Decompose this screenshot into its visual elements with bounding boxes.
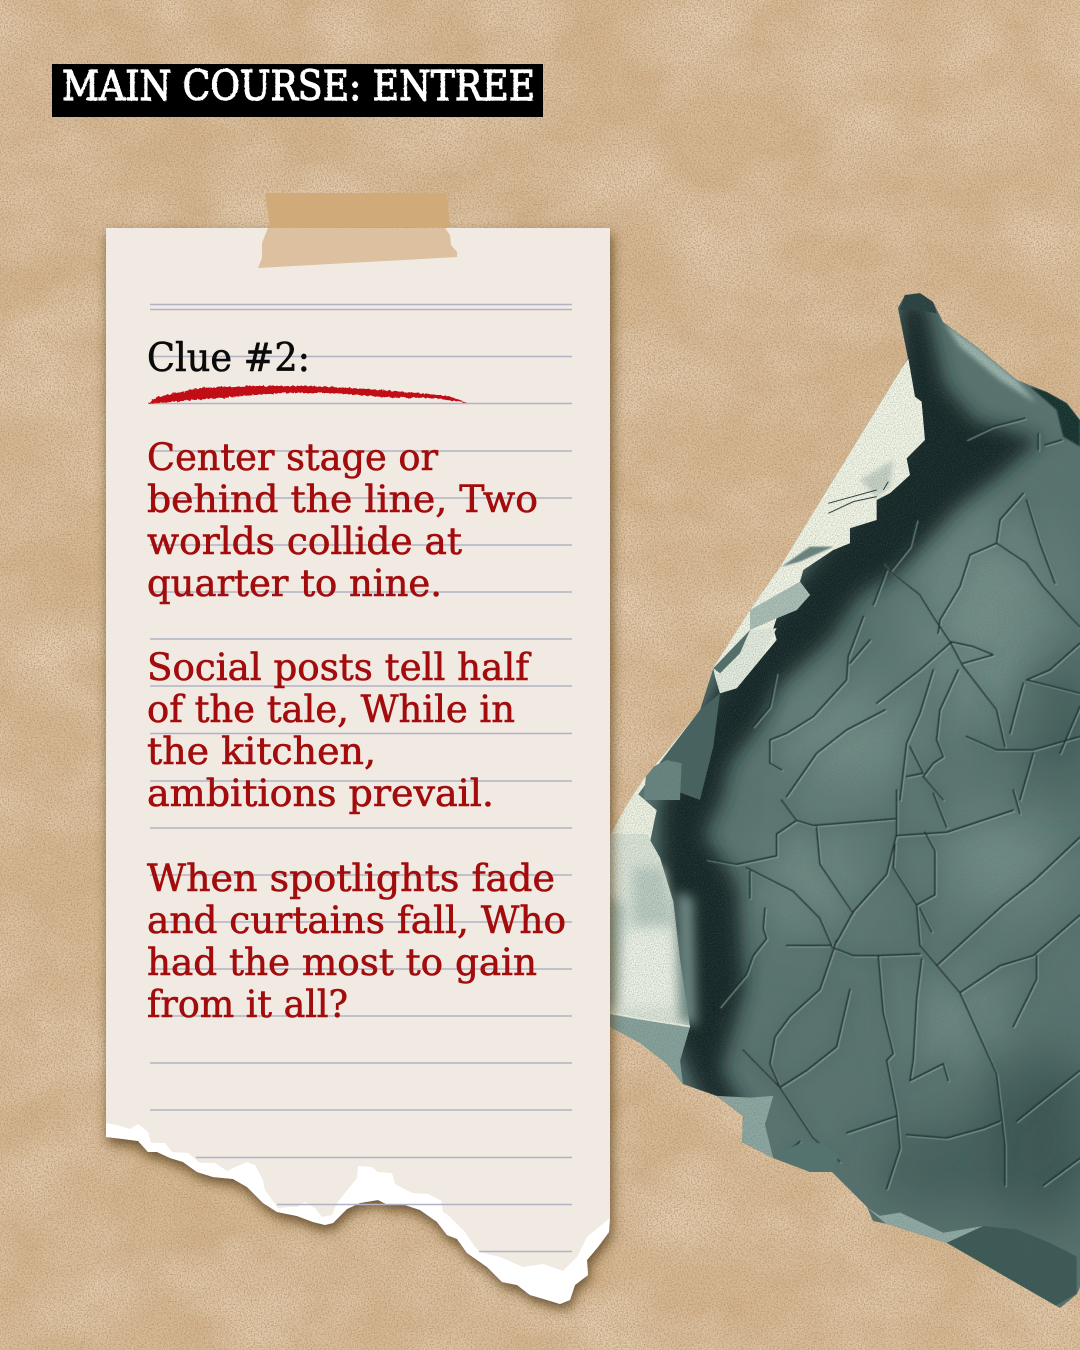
verse 1: Center stage or bbox=[147, 436, 438, 479]
verse 3 bbox=[147, 857, 566, 1026]
upper cream flap bbox=[615, 358, 925, 826]
verse 2: the kitchen, bbox=[147, 730, 376, 773]
verse 1: behind the line, Two bbox=[147, 478, 538, 521]
red brush underline bbox=[148, 386, 468, 404]
notebook rule lines bbox=[150, 304, 572, 1252]
verse 1: worlds collide at bbox=[147, 520, 463, 563]
verse 3: and curtains fall, Who bbox=[147, 899, 566, 942]
paper face bbox=[106, 228, 610, 1271]
verse 1: quarter to nine. bbox=[147, 562, 442, 605]
verse 1 bbox=[147, 436, 538, 605]
verse 2: of the tale, While in bbox=[147, 688, 515, 731]
verse 2: Social posts tell half bbox=[147, 646, 532, 689]
verse 2 bbox=[147, 646, 532, 815]
lower cream flap bbox=[590, 790, 1077, 1307]
verse 3: had the most to gain bbox=[147, 941, 537, 984]
masking tape bbox=[258, 193, 457, 268]
note paper sheet bbox=[106, 228, 610, 1304]
verse 2: ambitions prevail. bbox=[147, 772, 494, 815]
title banner: MAIN COURSE: ENTREE bbox=[62, 62, 535, 110]
torn crumpled green paper bbox=[610, 293, 1080, 1308]
deep shadow under torn edge bbox=[660, 300, 1040, 1125]
verse 3: When spotlights fade bbox=[147, 857, 555, 900]
heading: Clue #2: Clue #2: bbox=[147, 336, 310, 381]
verse 3: from it all? bbox=[147, 983, 348, 1026]
torn white edge bbox=[106, 228, 610, 1304]
